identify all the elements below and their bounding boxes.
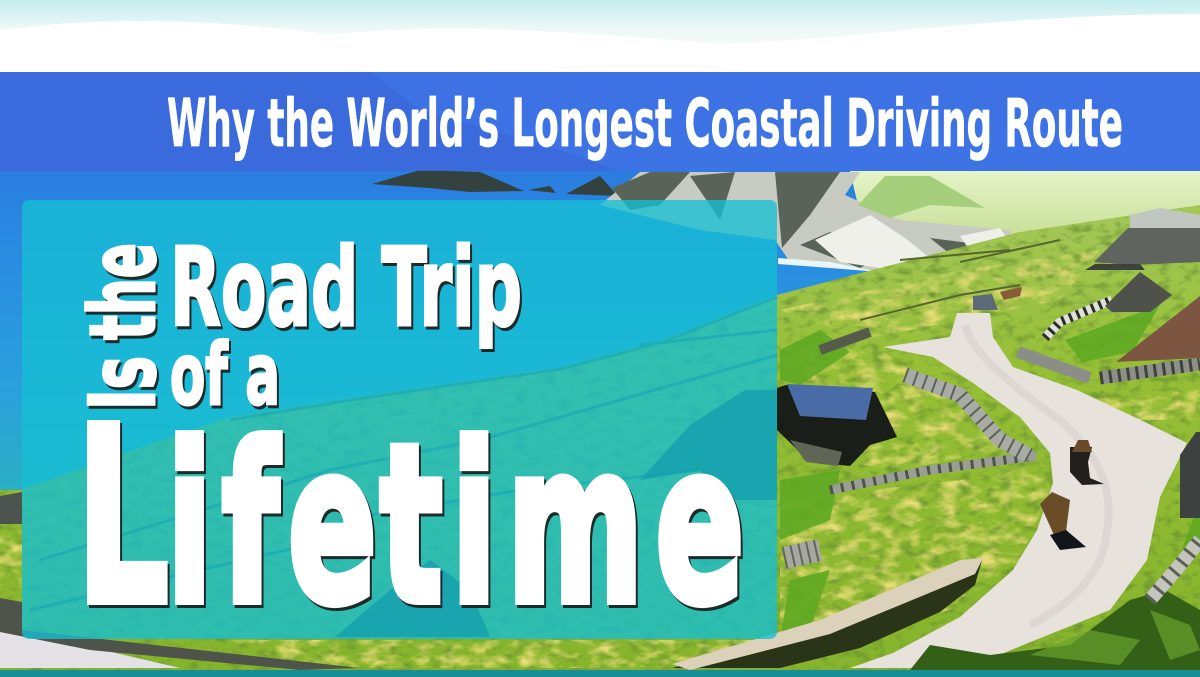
left foreground road [0, 628, 180, 668]
front wall top [672, 558, 983, 670]
distant headland [0, 72, 620, 171]
bright green patches [780, 305, 1200, 640]
offshore islands [372, 170, 618, 196]
white rocks [815, 215, 1012, 268]
dark farmhouse seen through panel [640, 390, 777, 500]
words: Road Trip: Road Trip [170, 226, 522, 351]
cliffs [600, 172, 1018, 272]
far fields [850, 171, 1200, 300]
bottom strip [0, 670, 1200, 677]
title banner [0, 72, 1200, 171]
left stone wall [0, 598, 360, 670]
brown ploughed field [1116, 296, 1200, 362]
cottage seen through panel [335, 560, 490, 637]
motorcycle riders [1040, 440, 1104, 550]
white surf [778, 258, 880, 272]
upper houses [1085, 208, 1200, 312]
sunlit grass texture [0, 250, 1200, 668]
word: Lifetime: L [77, 377, 169, 657]
sea [0, 72, 1200, 522]
right stone house [1180, 432, 1200, 518]
land [0, 205, 1200, 670]
stacked headline [71, 226, 744, 657]
land texture [0, 205, 1200, 670]
word: Is: Is [71, 356, 176, 410]
left dark rocks [0, 492, 22, 524]
word: Lifetime: ifetime [167, 400, 744, 652]
sky and clouds [0, 0, 1200, 72]
shoreline and field walls seen through panel [30, 297, 777, 610]
house: blue roof cottage [777, 384, 897, 466]
cliff shadows [612, 172, 985, 268]
stone walls [784, 240, 1200, 600]
car and van [973, 287, 1022, 310]
teal title panel [22, 200, 777, 657]
banner bar [0, 72, 1200, 171]
panel background [22, 200, 777, 639]
main road [850, 313, 1187, 668]
green headland [858, 176, 985, 218]
words: of a: of a [170, 326, 280, 425]
word: the: the [71, 243, 176, 340]
road centre shading [965, 325, 1109, 625]
front stone wall shadow [672, 560, 982, 668]
bottom right shrubs [910, 590, 1200, 670]
